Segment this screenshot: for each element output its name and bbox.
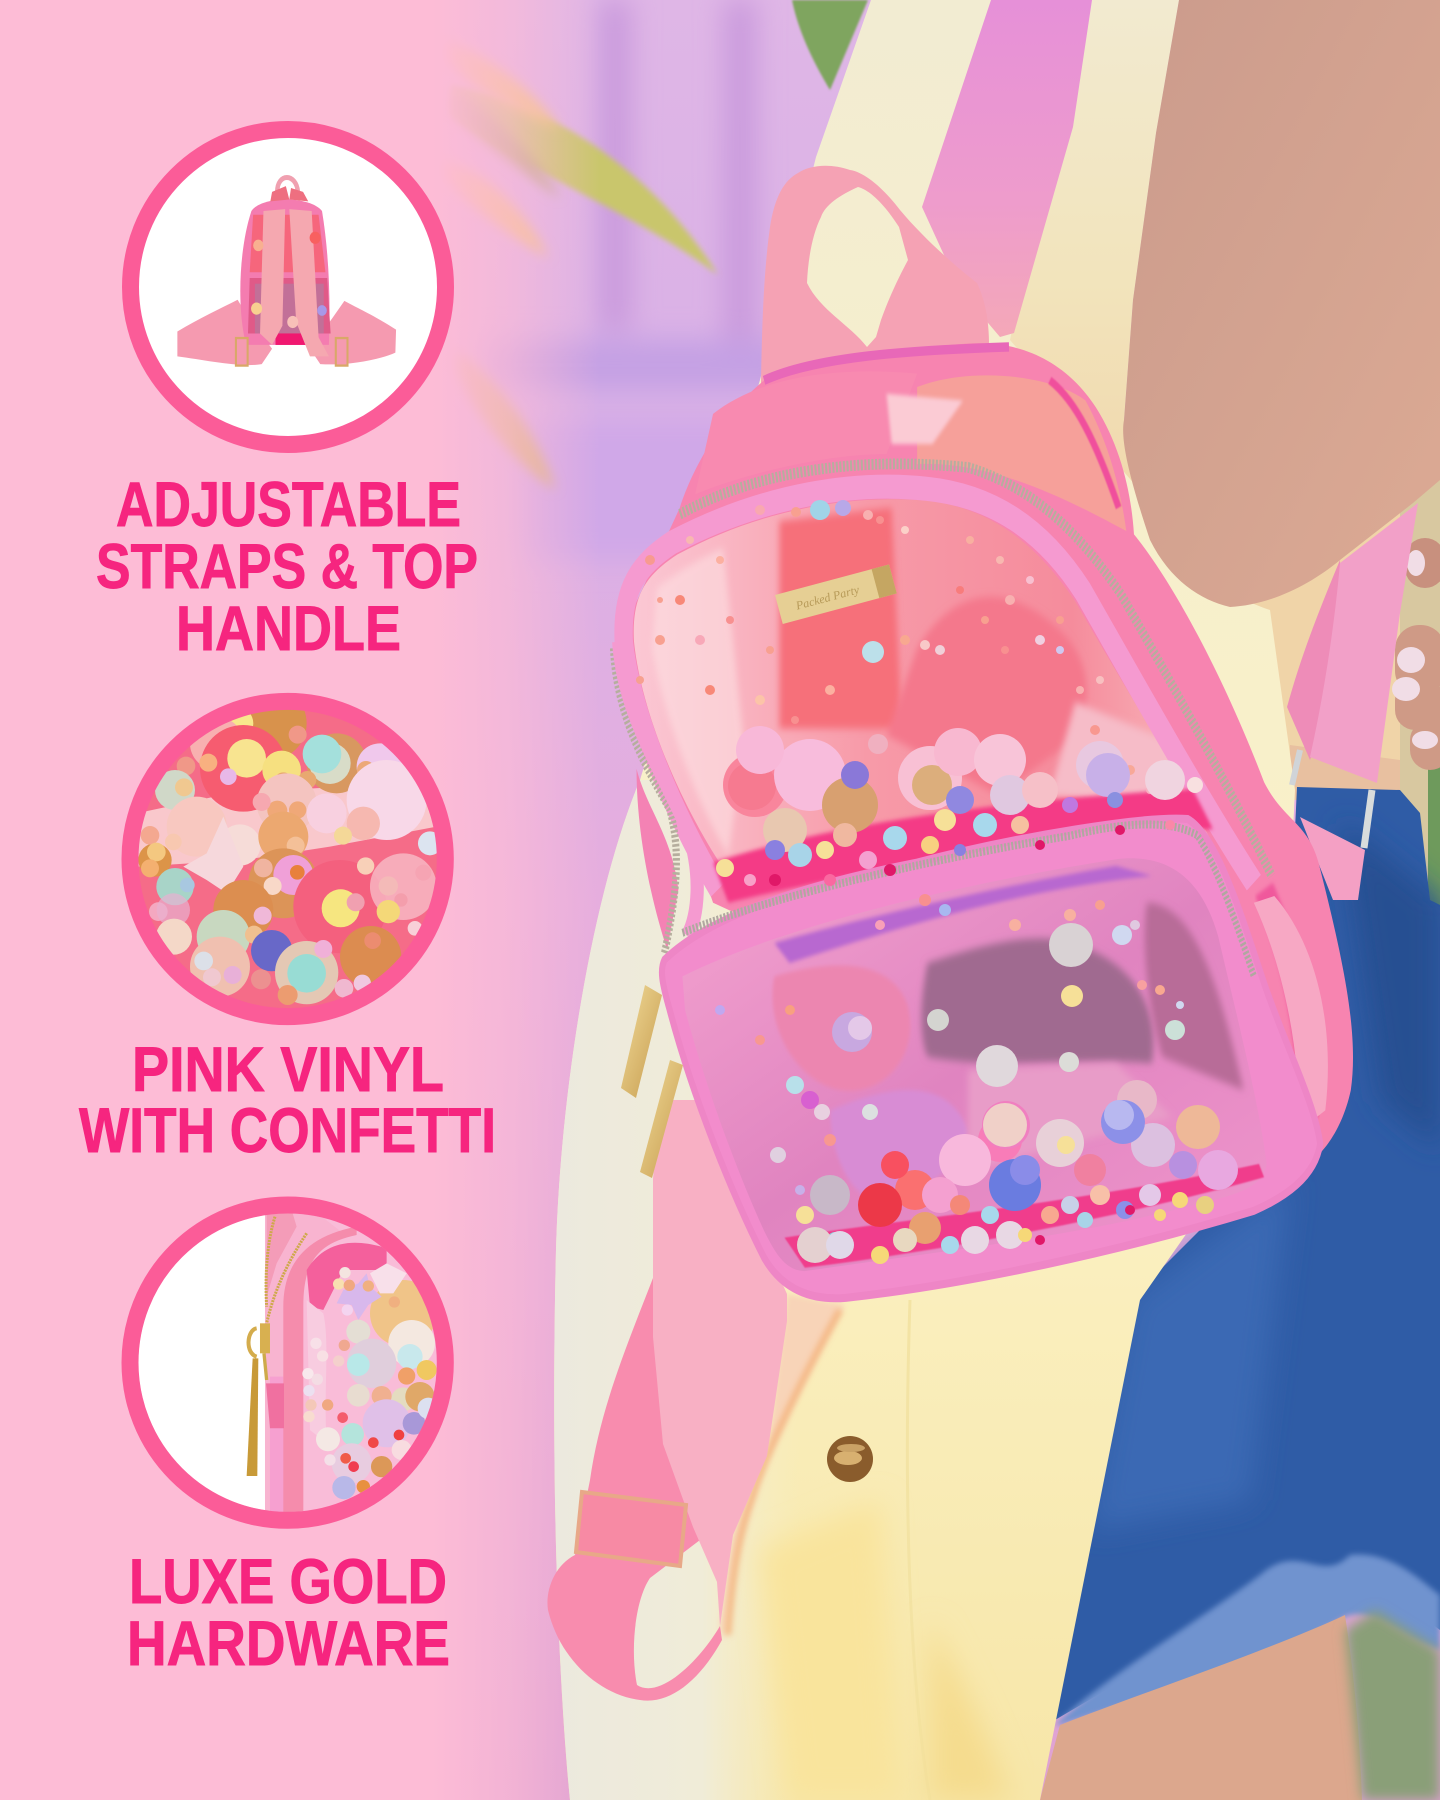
model: arm skin [1123, 0, 1440, 607]
right side strap and buckle [1287, 503, 1418, 900]
brand plate on backpack: Packed Party [793, 582, 861, 613]
panel highlights [779, 508, 902, 729]
label: adjustable straps and top handle [96, 470, 478, 664]
side view photo [138, 1214, 436, 1512]
label: luxe gold hardware: HARDWARE [127, 1609, 450, 1679]
pocket window [682, 858, 1267, 1271]
backpack [614, 343, 1353, 1298]
label: pink vinyl with confetti [79, 1035, 496, 1166]
label: adjustable straps and top handle: HANDLE [176, 594, 401, 664]
top carry handle [761, 166, 989, 395]
pocket zipper [682, 824, 1254, 976]
ring [130, 130, 446, 444]
back shell [621, 343, 1353, 1171]
label: pink vinyl with confetti: PINK VINYL [132, 1035, 444, 1105]
feature circle 1: adjustable straps [130, 130, 446, 444]
label: adjustable straps and top handle: STRAPS & TOP [96, 532, 478, 602]
confetti in main panel [636, 500, 1203, 886]
blurred foliage at top [440, 0, 868, 490]
orange fringe [728, 1310, 840, 1635]
zipper pulls [621, 985, 683, 1178]
main front panel [634, 499, 1218, 876]
buckle [576, 1492, 686, 1566]
left side gusset [637, 769, 678, 950]
confetti band at bottom of main panel [713, 789, 1213, 903]
main panel rim [624, 487, 1254, 889]
lower hanging strap with buckle [547, 1100, 845, 1701]
model: lower leg [1040, 1610, 1440, 1800]
model: denim shorts [1055, 787, 1440, 1725]
ring [130, 701, 445, 1017]
confetti in front pocket [715, 894, 1238, 1264]
confetti photo [138, 710, 437, 1008]
label: luxe gold hardware: LUXE GOLD [129, 1547, 447, 1617]
back section of strap [547, 1278, 722, 1701]
feature circle 2: pink vinyl with confetti [122, 692, 454, 1026]
cardigan button [827, 1436, 873, 1482]
label: pink vinyl with confetti: WITH CONFETTI [79, 1096, 496, 1166]
white disc [138, 137, 438, 437]
front section of strap [653, 1100, 787, 1626]
model: midriff behind strap [1200, 480, 1440, 910]
ring [130, 1205, 445, 1520]
cardigan: cream shirt [554, 0, 1295, 1800]
label: adjustable straps and top handle: ADJUSTABLE [116, 470, 461, 540]
shoulder strap [922, 0, 1092, 337]
brand plate on backpack [775, 564, 897, 624]
peach shadow beside strap [720, 1294, 845, 1640]
model: fingers holding strap [1392, 538, 1440, 770]
zippers [680, 464, 1272, 876]
front pocket [662, 819, 1320, 1298]
label: luxe gold hardware [127, 1547, 450, 1679]
left pink panel [0, 0, 600, 1800]
mini backpack back view [177, 177, 396, 366]
feature circle 3: luxe gold hardware [122, 1196, 454, 1529]
